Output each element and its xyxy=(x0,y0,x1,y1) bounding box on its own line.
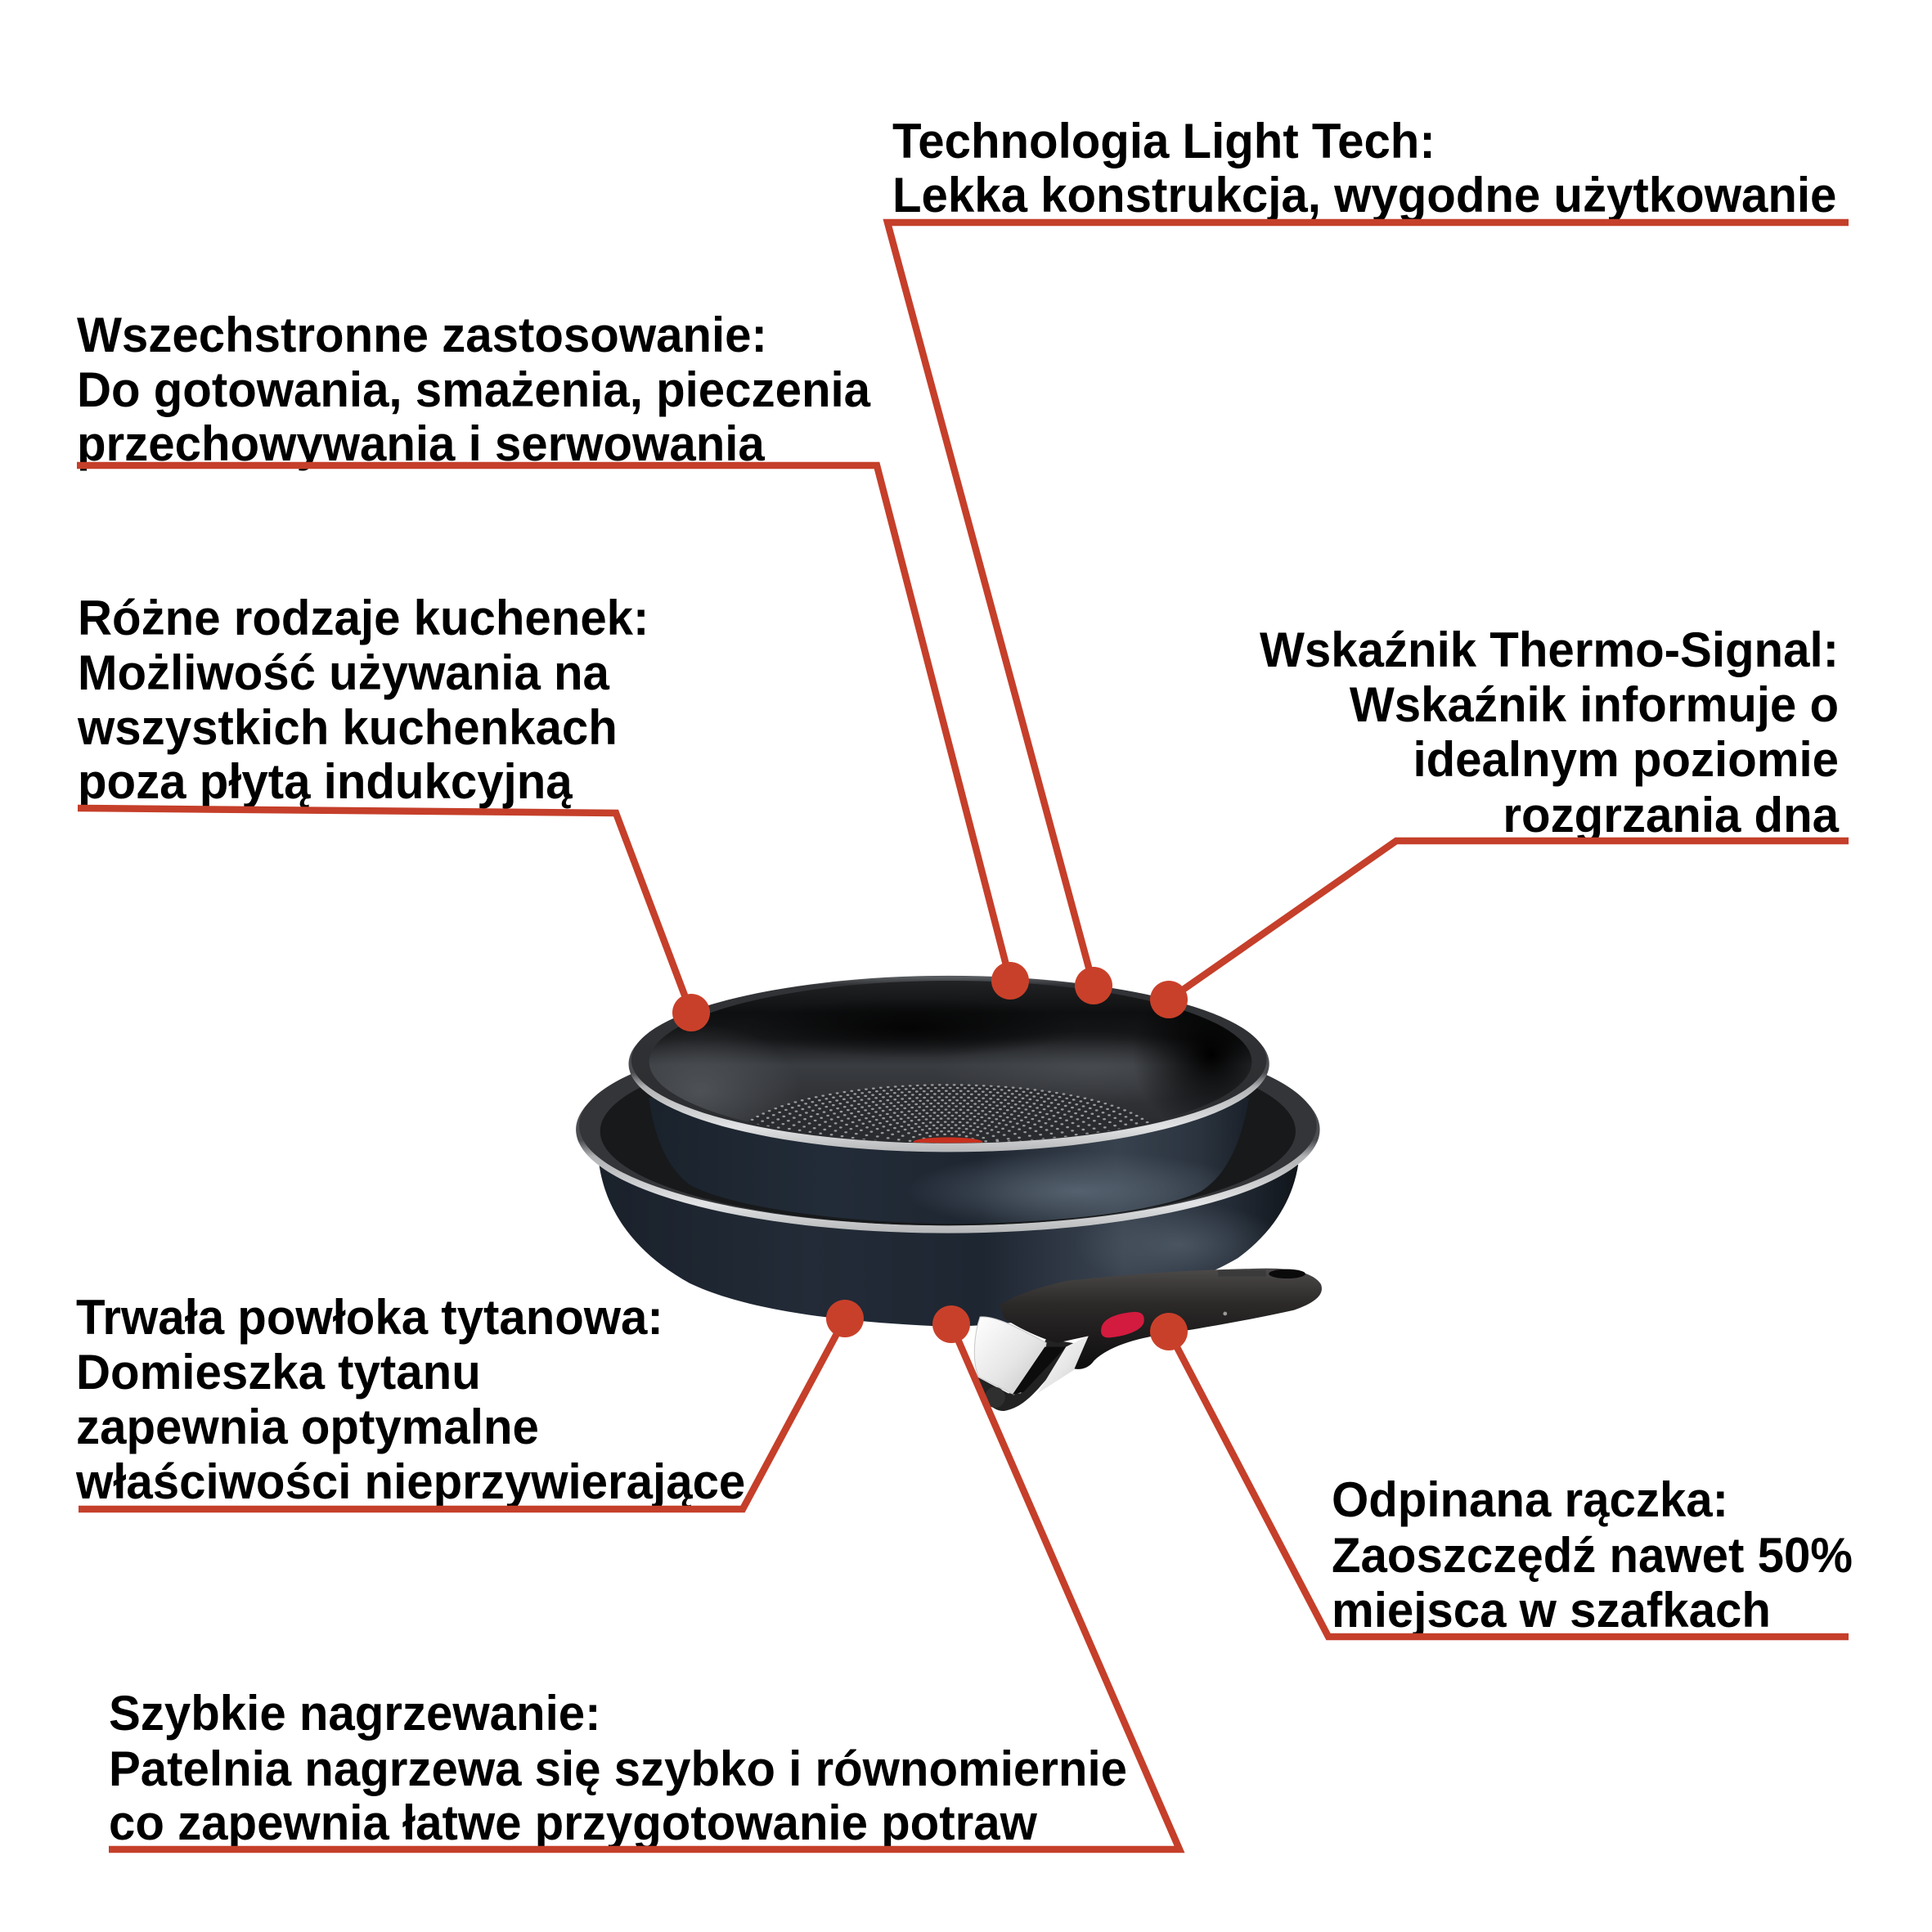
callout: Różne rodzaje kuchenek xyxy=(77,590,710,1031)
callout: Szybkie nagrzewanie: Szybkie nagrzewanie: xyxy=(109,1685,600,1741)
handle release button xyxy=(1101,1312,1144,1337)
callout: Szybkie nagrzewanie xyxy=(109,1305,1179,1850)
detachable handle xyxy=(974,1269,1322,1411)
upper pan body xyxy=(649,1098,1253,1232)
callout: Różne rodzaje kuchenek: wszystkich kuchenkach xyxy=(77,699,618,755)
callout: Wszechstronne zastosowanie xyxy=(77,307,1029,1000)
callout: Wskaźnik Thermo-Signal: Wskaźnik informuje o xyxy=(1350,676,1839,732)
callout: Wszechstronne zastosowanie: Do gotowania, smażenia, pieczenia xyxy=(77,362,871,417)
callout: Technologia Light Tech xyxy=(887,113,1849,1004)
callout: Wskaźnik Thermo-Signal xyxy=(1150,622,1849,1018)
callout: Różne rodzaje kuchenek: poza płytą indukcyjną xyxy=(78,753,573,809)
callout: Różne rodzaje kuchenek: Różne rodzaje kuchenek: xyxy=(78,590,649,645)
callout: Wskaźnik Thermo-Signal: rozgrzania dna xyxy=(1503,787,1840,842)
callout: Różne rodzaje kuchenek: Możliwość używania na xyxy=(78,645,610,700)
callout: Wskaźnik Thermo-Signal: Wskaźnik Thermo-Signal: xyxy=(1260,622,1839,677)
callout: Trwała powłoka tytanowa: Trwała powłoka tytanowa: xyxy=(76,1289,663,1345)
callout: Wskaźnik Thermo-Signal: idealnym poziomie xyxy=(1413,731,1839,787)
callout: Technologia Light Tech: Lekka konstrukcja, wygodne użytkowanie xyxy=(892,167,1836,222)
callout: Odpinana rączka: Odpinana rączka: xyxy=(1332,1471,1728,1527)
lower pan body xyxy=(599,1165,1298,1327)
callout: Wszechstronne zastosowanie: przechowywania i serwowania xyxy=(77,416,766,471)
callout: Wszechstronne zastosowanie: Wszechstronne zastosowanie: xyxy=(77,307,767,362)
upper pan interior xyxy=(600,974,1291,1201)
illustration: two stacked frying pans with handle xyxy=(576,974,1322,1411)
callout: Trwała powłoka tytanowa: zapewnia optymalne xyxy=(76,1399,539,1454)
upper pan rim xyxy=(629,976,1269,1152)
callout: Trwała powłoka tytanowa: właściwości nieprzywierające xyxy=(75,1453,745,1509)
lower pan rim xyxy=(576,1074,1320,1233)
callout: Odpinana rączka: miejsca w szafkach xyxy=(1332,1582,1771,1638)
callout: Odpinana rączka: Zaoszczędź nawet 50% xyxy=(1332,1527,1853,1583)
callout: Trwała powłoka tytanowa: Domieszka tytanu xyxy=(76,1344,481,1400)
callout: Technologia Light Tech: Technologia Light Tech: xyxy=(892,113,1436,168)
callout: Szybkie nagrzewanie: Patelnia nagrzewa się szybko i równomiernie xyxy=(109,1741,1127,1796)
callout: Trwała powłoka tytanowa xyxy=(75,1289,864,1509)
callout: Szybkie nagrzewanie: co zapewnia łatwe przygotowanie potraw xyxy=(109,1795,1038,1850)
thermo-signal red spot xyxy=(913,1137,983,1143)
callout: Odpinana rączka xyxy=(1150,1313,1853,1638)
thermo-spot dotted base xyxy=(751,1084,1148,1143)
